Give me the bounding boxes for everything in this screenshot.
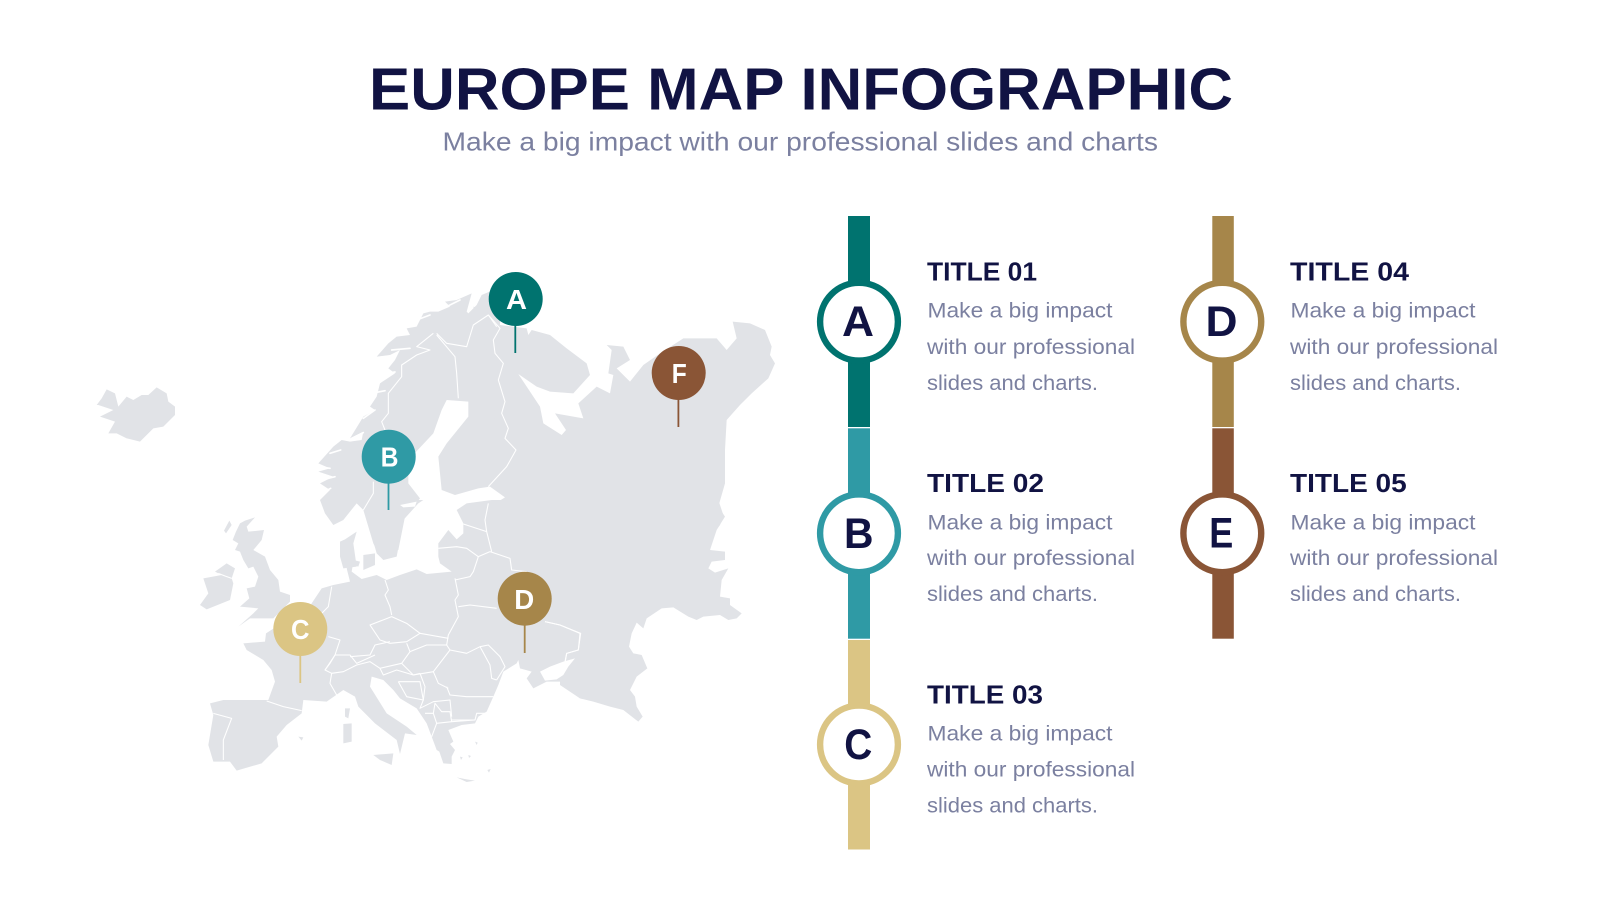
item C: title 03 — [820, 640, 1135, 850]
item C: title 03: with our professional — [926, 759, 1135, 782]
item C: title 03: slides and charts. — [927, 795, 1098, 818]
pin F — [652, 346, 706, 427]
item E: title 05: E — [1209, 510, 1233, 558]
item E: title 05: Make a big impact — [1290, 511, 1476, 534]
item A: title 01: A — [842, 299, 874, 346]
item A: title 01: slides and charts. — [927, 372, 1098, 395]
pin F: F — [672, 358, 687, 389]
item A: title 01: TITLE 01 — [927, 256, 1037, 286]
map of Europe — [97, 290, 775, 782]
item A: title 01: with our professional — [926, 336, 1135, 359]
item D: title 04 — [1183, 216, 1498, 427]
item C: title 03: TITLE 03 — [927, 679, 1043, 709]
pin D: D — [514, 584, 534, 615]
item D: title 04: TITLE 04 — [1290, 256, 1410, 286]
item C: title 03: Make a big impact — [928, 723, 1113, 746]
subtitle: Make a big impact with our professional slides and charts — [442, 127, 1158, 157]
item B: title 02: with our professional — [926, 547, 1135, 570]
pin A — [489, 272, 543, 353]
pin D — [498, 572, 552, 653]
item D: title 04: slides and charts. — [1290, 372, 1461, 395]
item E: title 05: with our professional — [1289, 547, 1498, 570]
pin C — [273, 602, 327, 683]
pin B: B — [381, 442, 398, 473]
item D: title 04: D — [1206, 299, 1238, 346]
item E: title 05: TITLE 05 — [1290, 468, 1407, 498]
item C: title 03: C — [844, 722, 872, 769]
item D: title 04: Make a big impact — [1290, 300, 1476, 323]
pin B — [362, 430, 416, 510]
item A: title 01 — [820, 216, 1135, 427]
item B: title 02: Make a big impact — [928, 511, 1113, 534]
item B: title 02 — [820, 428, 1135, 639]
pin A: A — [506, 284, 527, 315]
item E: title 05 — [1183, 428, 1498, 639]
item A: title 01: Make a big impact — [928, 300, 1113, 323]
pin C: C — [291, 614, 310, 645]
item B: title 02: B — [844, 511, 874, 558]
item B: title 02: slides and charts. — [927, 583, 1098, 606]
item E: title 05: slides and charts. — [1290, 583, 1461, 606]
item B: title 02: TITLE 02 — [927, 468, 1044, 498]
item D: title 04: with our professional — [1289, 336, 1498, 359]
title: EUROPE MAP INFOGRAPHIC — [369, 55, 1233, 122]
